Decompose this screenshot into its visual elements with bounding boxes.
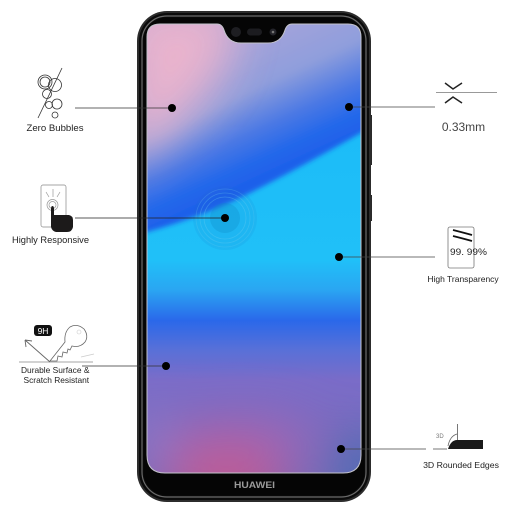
icon: 9H key scratch: 9H [38, 326, 48, 336]
label: Highly Responsive [12, 235, 89, 245]
phone [137, 11, 372, 502]
side buttons [369, 115, 372, 221]
label: Zero Bubbles [26, 123, 84, 134]
notch camera [231, 27, 276, 37]
brand: HUAWEI [234, 480, 275, 491]
icon: 9H key scratch [19, 325, 94, 362]
icon: thin chevrons [436, 83, 497, 103]
icon: bubbles [38, 68, 62, 118]
label: 0.33mm [442, 120, 485, 134]
callout: thickness [345, 83, 497, 134]
icon: 3D edge [433, 424, 483, 449]
icon: 99.99 percent glass [448, 227, 488, 268]
icon: 3D edge: 3D [436, 434, 444, 440]
icon: finger touch [41, 185, 73, 232]
label: 3D Rounded Edges [423, 460, 500, 470]
screen edge [147, 24, 361, 473]
callout: high transparency [335, 227, 499, 284]
screen wallpaper [148, 24, 360, 472]
label: Scratch Resistant [24, 375, 90, 385]
phone body [137, 11, 371, 502]
callout: durable surface [19, 325, 170, 385]
callout: highly responsive [12, 185, 229, 245]
label: Durable Surface & [21, 365, 90, 375]
label: High Transparency [427, 274, 499, 284]
callout: rounded edges [337, 424, 500, 470]
callout: zero bubbles [26, 68, 176, 134]
icon: 99.99 percent glass: 99. 99% [450, 247, 488, 258]
touch ripple [193, 186, 257, 250]
